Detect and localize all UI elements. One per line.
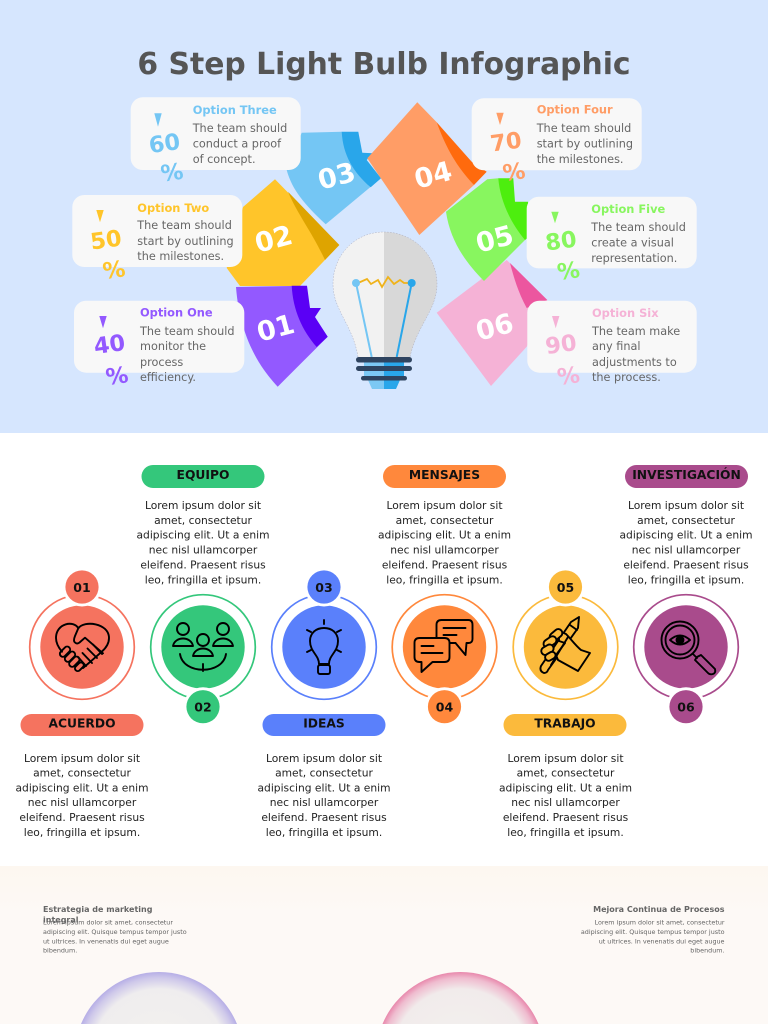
text: acuerdo description: nec nisl ullamcorper [28,796,137,809]
text: mejora continua: Mejora Continua de Procesos [593,905,725,914]
text: mejora continua: bibendum. [690,946,724,954]
step 05: trabajo: TRABAJO [534,716,596,730]
step 04: mensajes: 04 [436,700,453,714]
step 02: equipo [136,465,270,726]
text: equipo description: eleifend. Praesent risus [140,558,266,572]
card: option two: the milestones. [137,250,224,263]
text: estrategia de marketing: bibendum. [43,946,77,954]
circle: purple [81,972,237,1024]
panel: light bulb infographic [0,0,768,433]
text: acuerdo description: amet, consectetur [33,766,132,780]
icon: team [173,623,233,671]
text: mensajes description: eleifend. Praesent risus [382,558,508,572]
text: equipo description: leo, fringilla et ipsum. [145,574,261,586]
text: acuerdo description: eleifend. Praesent risus [19,811,145,824]
card: option three: conduct a proof [193,138,282,150]
text: ideas description: Lorem ipsum dolor sit [266,752,382,765]
card: option one: monitor the [140,340,206,353]
card: option five: representation. [591,252,677,265]
card: option four: start by outlining [537,138,633,150]
card: option five: create a visual [591,236,674,250]
card: option four: % [501,158,527,187]
step 03: ideas: IDEAS [303,716,345,730]
step 06: investigacion: INVESTIGACIÓN [632,467,741,482]
card: option two: 50 [89,226,123,256]
card: option one: % [104,362,130,391]
text: investigacion description: adipiscing elit. Ut a enim [619,528,753,542]
step 01: acuerdo [15,568,149,839]
card: option six: % [556,362,581,391]
card: option six: 90 [544,330,578,360]
card: option five: The team should [590,221,686,234]
card: option five: Option Five [591,202,665,216]
petal 03 [287,132,381,224]
text: ideas description [257,752,391,839]
pill: mensajes [383,465,506,488]
card: option six: Option Six [592,306,659,320]
text: trabajo description: eleifend. Praesent risus [503,811,629,824]
card: option six: the process. [592,371,661,384]
card: option six: any final [592,340,640,353]
text: trabajo description: amet, consectetur [517,766,615,780]
panel: bottom strategy section [0,866,768,1024]
text: trabajo description: leo, fringilla et ipsum. [507,826,624,839]
text: trabajo description: nec nisl ullamcorper [511,796,620,809]
text: ideas description: leo, fringilla et ipsum. [266,826,382,839]
petal 06: 06 [473,308,517,348]
text: mensajes description: nec nisl ullamcorper [390,544,499,556]
card: option four [472,98,642,187]
card: option one: The team should [139,325,235,338]
pill: acuerdo [20,714,144,736]
text: investigacion description: nec nisl ullamcorper [632,544,741,556]
title: 6 Step Light Bulb Infographic [137,47,631,82]
step 05: trabajo [499,568,632,839]
text: mejora continua: Lorem ipsum dolor sit amet, consectetur [595,918,725,926]
icon: magnifier with eye [662,622,715,674]
step 04: mensajes: MENSAJES [409,468,480,482]
petal 01 [236,286,328,387]
text: mejora continua: adipiscing elit. Quisque tempus tempor justo [581,928,725,936]
text: estrategia de marketing: Estrategia de marketing [43,905,153,914]
card: option six: The team make [591,325,680,338]
card: option two [72,195,242,285]
card: option five [527,197,697,286]
step 04: mensajes [378,465,511,726]
petal 05: 05 [473,220,517,260]
text: acuerdo description [15,752,149,839]
step 02: equipo: 02 [194,700,212,714]
text: acuerdo description: Lorem ipsum dolor sit [24,752,140,765]
pill: trabajo [504,714,626,736]
card: option one: Option One [140,306,213,320]
petal 02: 02 [252,220,296,260]
text: equipo description: nec nisl ullamcorper [149,544,258,556]
text: equipo description: amet, consectetur [154,514,253,527]
card: option four: Option Four [537,102,613,116]
text: estrategia de marketing: Lorem ipsum dolor sit amet, consectetur [43,918,173,926]
text: mensajes description [378,499,511,586]
step 01: acuerdo: ACUERDO [48,716,116,730]
petal 04 [367,102,487,235]
icon: light bulb [333,232,437,389]
text: investigacion description: eleifend. Praesent risus [623,558,749,572]
text: trabajo description: Lorem ipsum dolor sit [507,752,624,765]
text: estrategia de marketing: ut ultrices. In venenatis dui eget augue [43,938,169,946]
pill: investigacion [625,465,748,488]
step 01: acuerdo: 01 [73,580,91,595]
text: trabajo description: adipiscing elit. Ut a enim [499,782,632,794]
text: ideas description: nec nisl ullamcorper [270,796,379,809]
petal 05 [446,178,530,281]
pill: equipo [142,465,264,488]
text: estrategia de marketing: integral [43,916,79,924]
card: option one: process [140,356,183,369]
icon: bulb [307,620,341,674]
card: option four: 70 [489,128,523,158]
circle: pink [382,972,538,1024]
text: mejora continua [581,905,725,954]
text: equipo description [136,499,270,586]
card: option five: % [556,257,581,286]
step 06: investigacion [619,465,753,726]
text: acuerdo description: leo, fringilla et ipsum. [24,826,140,839]
text: equipo description: Lorem ipsum dolor sit [145,499,261,512]
step 03: ideas [257,568,391,839]
text: acuerdo description: adipiscing elit. Ut a enim [15,782,149,794]
card: option four: the milestones. [537,153,624,166]
text: trabajo description [499,752,632,839]
pill: ideas [262,714,386,736]
card: option three: % [159,159,185,188]
petal 01: 01 [254,309,298,349]
card: option three [131,97,301,188]
petal 03: 03 [315,157,359,197]
card: option two: The team should [136,219,232,232]
petal 04: 04 [411,156,455,196]
text: estrategia de marketing [43,905,187,954]
petal 06 [437,260,547,386]
card: option two: Option Two [137,201,209,215]
panel: six numbered steps [0,433,768,866]
card: option one: efficiency. [140,371,196,384]
text: equipo description: adipiscing elit. Ut a enim [136,528,270,542]
text: mensajes description: Lorem ipsum dolor sit [386,499,503,512]
step 06: investigacion: 06 [677,700,695,714]
text: ideas description: amet, consectetur [275,766,374,780]
step 03: ideas: 03 [315,580,333,595]
card: option three: The team should [192,122,287,135]
text: ideas description: adipiscing elit. Ut a enim [257,782,391,794]
petal 02 [227,179,339,286]
step 05: trabajo: 05 [557,580,574,595]
card: option five: 80 [544,227,578,257]
text: investigacion description: leo, fringilla et ipsum. [628,574,744,586]
text: investigacion description [619,499,753,586]
icon: handshake heart [56,624,109,672]
text: mensajes description: adipiscing elit. Ut a enim [378,528,511,542]
card: option two: % [101,256,127,285]
card: option three: Option Three [193,103,277,117]
text: ideas description: eleifend. Praesent risus [261,811,387,824]
step 02: equipo: EQUIPO [177,468,229,482]
text: estrategia de marketing: adipiscing elit. Quisque tempus tempor justo [43,928,187,936]
card: option four: The team should [536,122,631,135]
card: option two: start by outlining [137,235,234,248]
icon: chat bubbles [414,620,472,672]
text: investigacion description: Lorem ipsum dolor sit [628,499,744,512]
card: option three: 60 [147,129,182,159]
card: option one [74,301,244,391]
card: option six: adjustments to [592,356,677,369]
icon: hand with pencil [540,617,590,673]
text: mensajes description: leo, fringilla et ipsum. [386,574,503,586]
text: mejora continua: ut ultrices. In venenatis dui eget augue [599,938,725,946]
text: mensajes description: amet, consectetur [396,514,494,527]
card: option one: 40 [92,330,127,360]
card: option three: of concept. [193,153,256,166]
card: option six [527,301,697,391]
text: investigacion description: amet, consectetur [637,514,736,527]
